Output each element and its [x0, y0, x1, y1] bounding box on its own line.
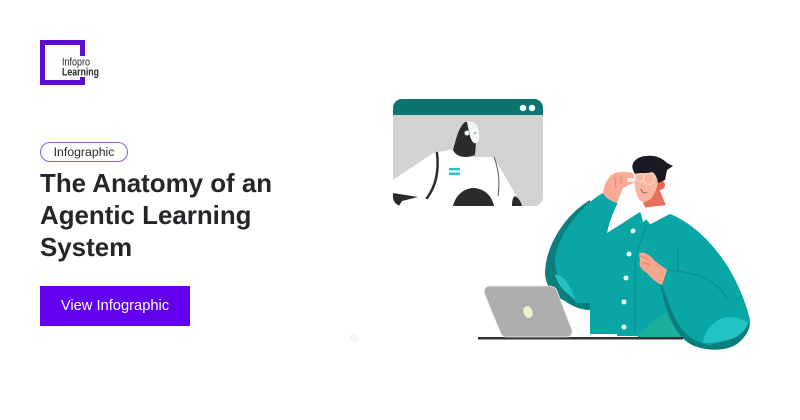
raised hand	[603, 172, 635, 203]
elbow patch	[555, 275, 575, 299]
button: View Infographic: View Infographic	[61, 298, 169, 314]
laptop base	[568, 334, 617, 337]
glasses	[636, 174, 654, 184]
logo	[40, 40, 99, 85]
hand on chest	[639, 252, 667, 285]
sleeve crease	[668, 247, 728, 300]
logo wordmark	[62, 56, 99, 78]
ear	[655, 180, 665, 190]
faint mark	[349, 333, 359, 343]
button: View Infographic	[40, 286, 190, 326]
laptop	[484, 286, 572, 337]
logo wordmark: Learning	[62, 66, 99, 78]
smile	[641, 189, 647, 193]
title: System	[40, 234, 132, 262]
hair	[632, 156, 673, 183]
torso and left sleeve	[555, 193, 705, 336]
logo bracket	[42, 42, 82, 82]
illustration	[349, 99, 750, 350]
right sleeve	[662, 214, 750, 345]
placket	[635, 223, 647, 333]
collar	[640, 205, 671, 224]
shirt hem	[637, 313, 682, 337]
cuff patch	[703, 317, 748, 343]
buttons	[622, 228, 636, 330]
face	[635, 170, 658, 202]
tag: Infographic: Infographic	[54, 145, 114, 159]
neck	[643, 186, 667, 212]
desk line	[478, 337, 683, 340]
title	[40, 170, 272, 262]
tag: Infographic	[40, 142, 128, 162]
title: The Anatomy of an	[40, 170, 272, 198]
title: Agentic Learning	[40, 202, 251, 230]
left sleeve shadow	[545, 200, 600, 310]
right sleeve shadow	[660, 280, 750, 350]
inner shirt white	[607, 190, 640, 233]
logo wordmark: Infopro	[62, 56, 90, 68]
video window with robot	[393, 99, 543, 206]
person	[545, 156, 750, 350]
